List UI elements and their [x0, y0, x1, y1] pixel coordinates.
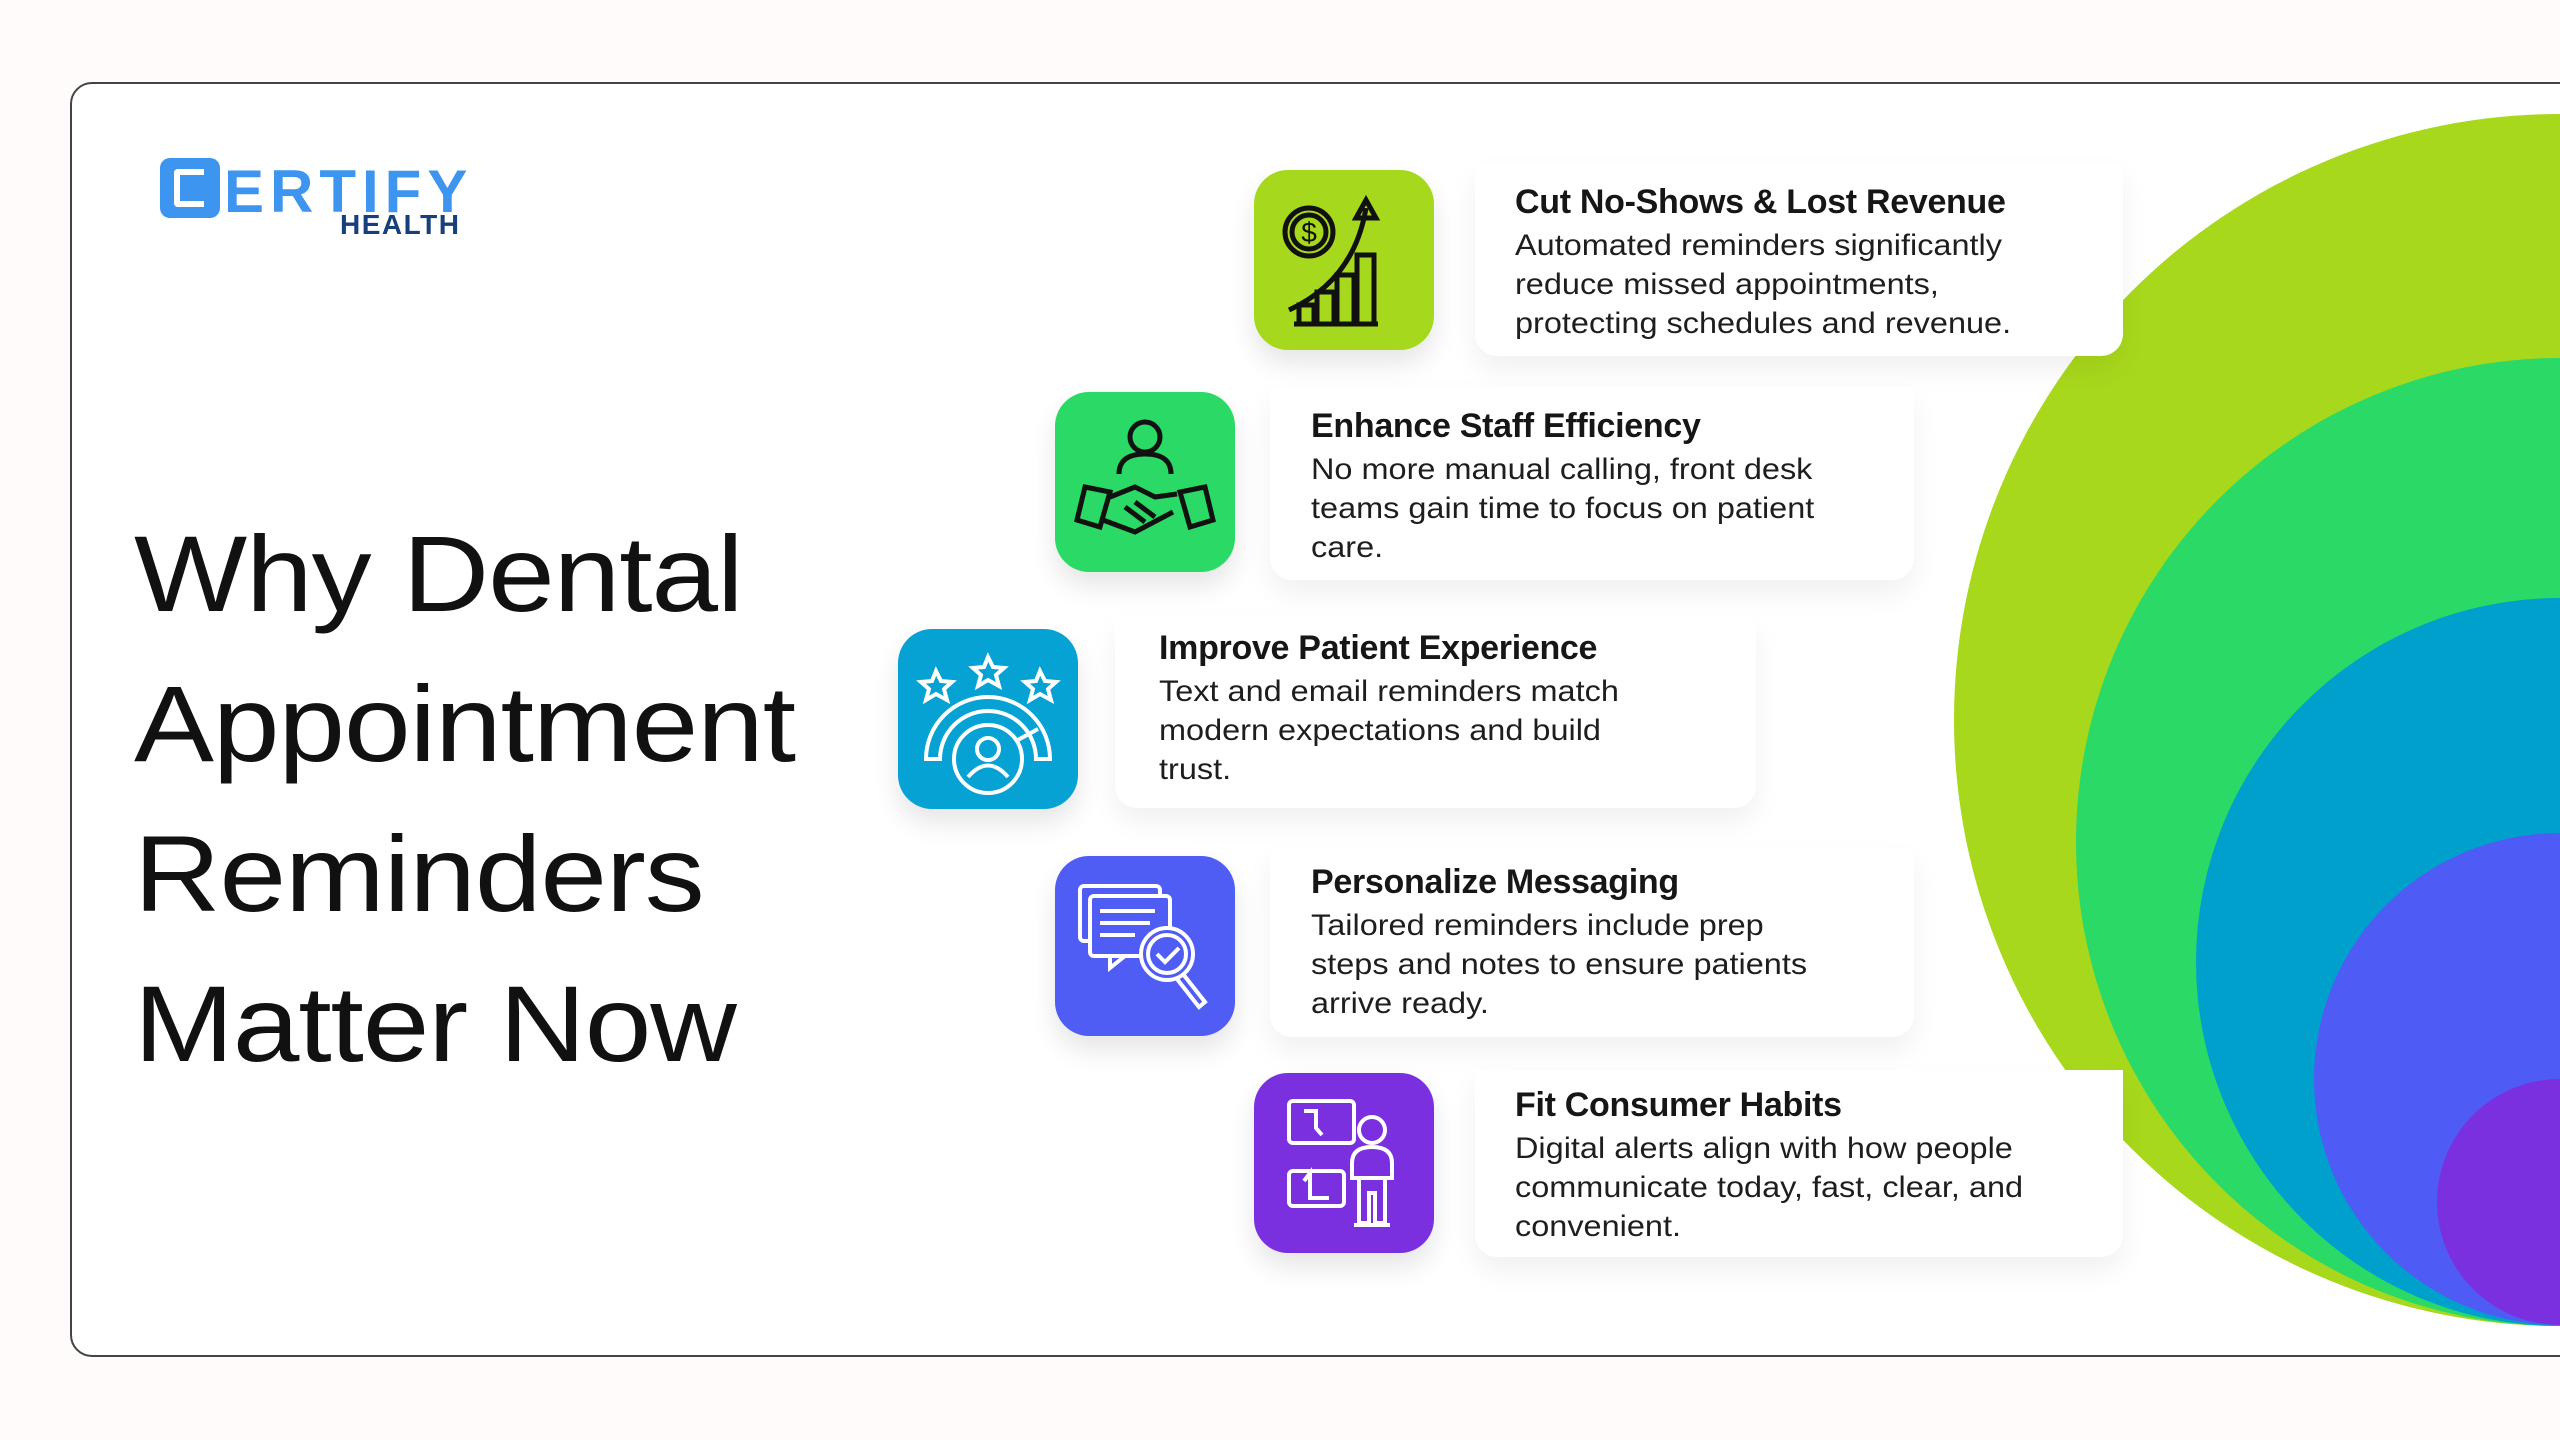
- text: cut no-shows: reduce missed appointments,: [1515, 268, 1939, 301]
- text: staff efficiency: Enhance Staff Efficiency: [1311, 407, 1701, 445]
- card 5: [1475, 1070, 2123, 1257]
- icon: revenue growth: [1254, 170, 1434, 350]
- text: cut no-shows: protecting schedules and revenue.: [1515, 307, 2011, 340]
- text: personalize messaging: arrive ready.: [1311, 987, 1489, 1020]
- icon: revenue growth: $: [1301, 217, 1317, 248]
- text: consumer habits: [1515, 1086, 2023, 1243]
- card 1: [1475, 163, 2123, 356]
- title: Matter Now: [134, 963, 736, 1084]
- icon: consumer habits: [1254, 1073, 1434, 1253]
- title: [134, 513, 796, 1084]
- text: consumer habits: communicate today, fast, clear, and: [1515, 1171, 2023, 1204]
- text: patient experience: [1159, 629, 1619, 786]
- text: patient experience: modern expectations and build: [1159, 714, 1601, 747]
- text: cut no-shows: Cut No-Shows & Lost Revenue: [1515, 183, 2006, 221]
- icon: handshake: [1055, 392, 1235, 572]
- text: patient experience: trust.: [1159, 753, 1231, 786]
- text: staff efficiency: care.: [1311, 531, 1383, 564]
- text: staff efficiency: No more manual calling, front desk: [1311, 453, 1812, 486]
- card 3: [1115, 617, 1756, 808]
- card 4: [1270, 849, 1914, 1037]
- text: consumer habits: convenient.: [1515, 1210, 1681, 1243]
- text: personalize messaging: Tailored reminders include prep: [1311, 909, 1764, 942]
- text: staff efficiency: [1311, 407, 1814, 564]
- text: staff efficiency: teams gain time to focus on patient: [1311, 492, 1814, 525]
- text: personalize messaging: steps and notes to ensure patients: [1311, 948, 1807, 981]
- text: patient experience: Text and email reminders match: [1159, 675, 1619, 708]
- logo: ERTIFY: [224, 158, 473, 225]
- text: personalize messaging: Personalize Messaging: [1311, 863, 1679, 901]
- title: Reminders: [134, 813, 704, 934]
- title: Appointment: [134, 663, 795, 784]
- logo: [160, 158, 473, 240]
- title: Why Dental: [134, 513, 743, 634]
- text: consumer habits: Fit Consumer Habits: [1515, 1086, 1842, 1124]
- card 2: [1270, 387, 1914, 580]
- text: cut no-shows: Automated reminders significantly: [1515, 229, 2002, 262]
- logo: HEALTH: [340, 209, 460, 240]
- text: consumer habits: Digital alerts align with how people: [1515, 1132, 2013, 1165]
- icon: personalized messaging: [1055, 856, 1235, 1036]
- icon: patient rating: [898, 629, 1078, 809]
- text: patient experience: Improve Patient Experience: [1159, 629, 1597, 667]
- text: cut no-shows: [1515, 183, 2011, 340]
- text: personalize messaging: [1311, 863, 1807, 1020]
